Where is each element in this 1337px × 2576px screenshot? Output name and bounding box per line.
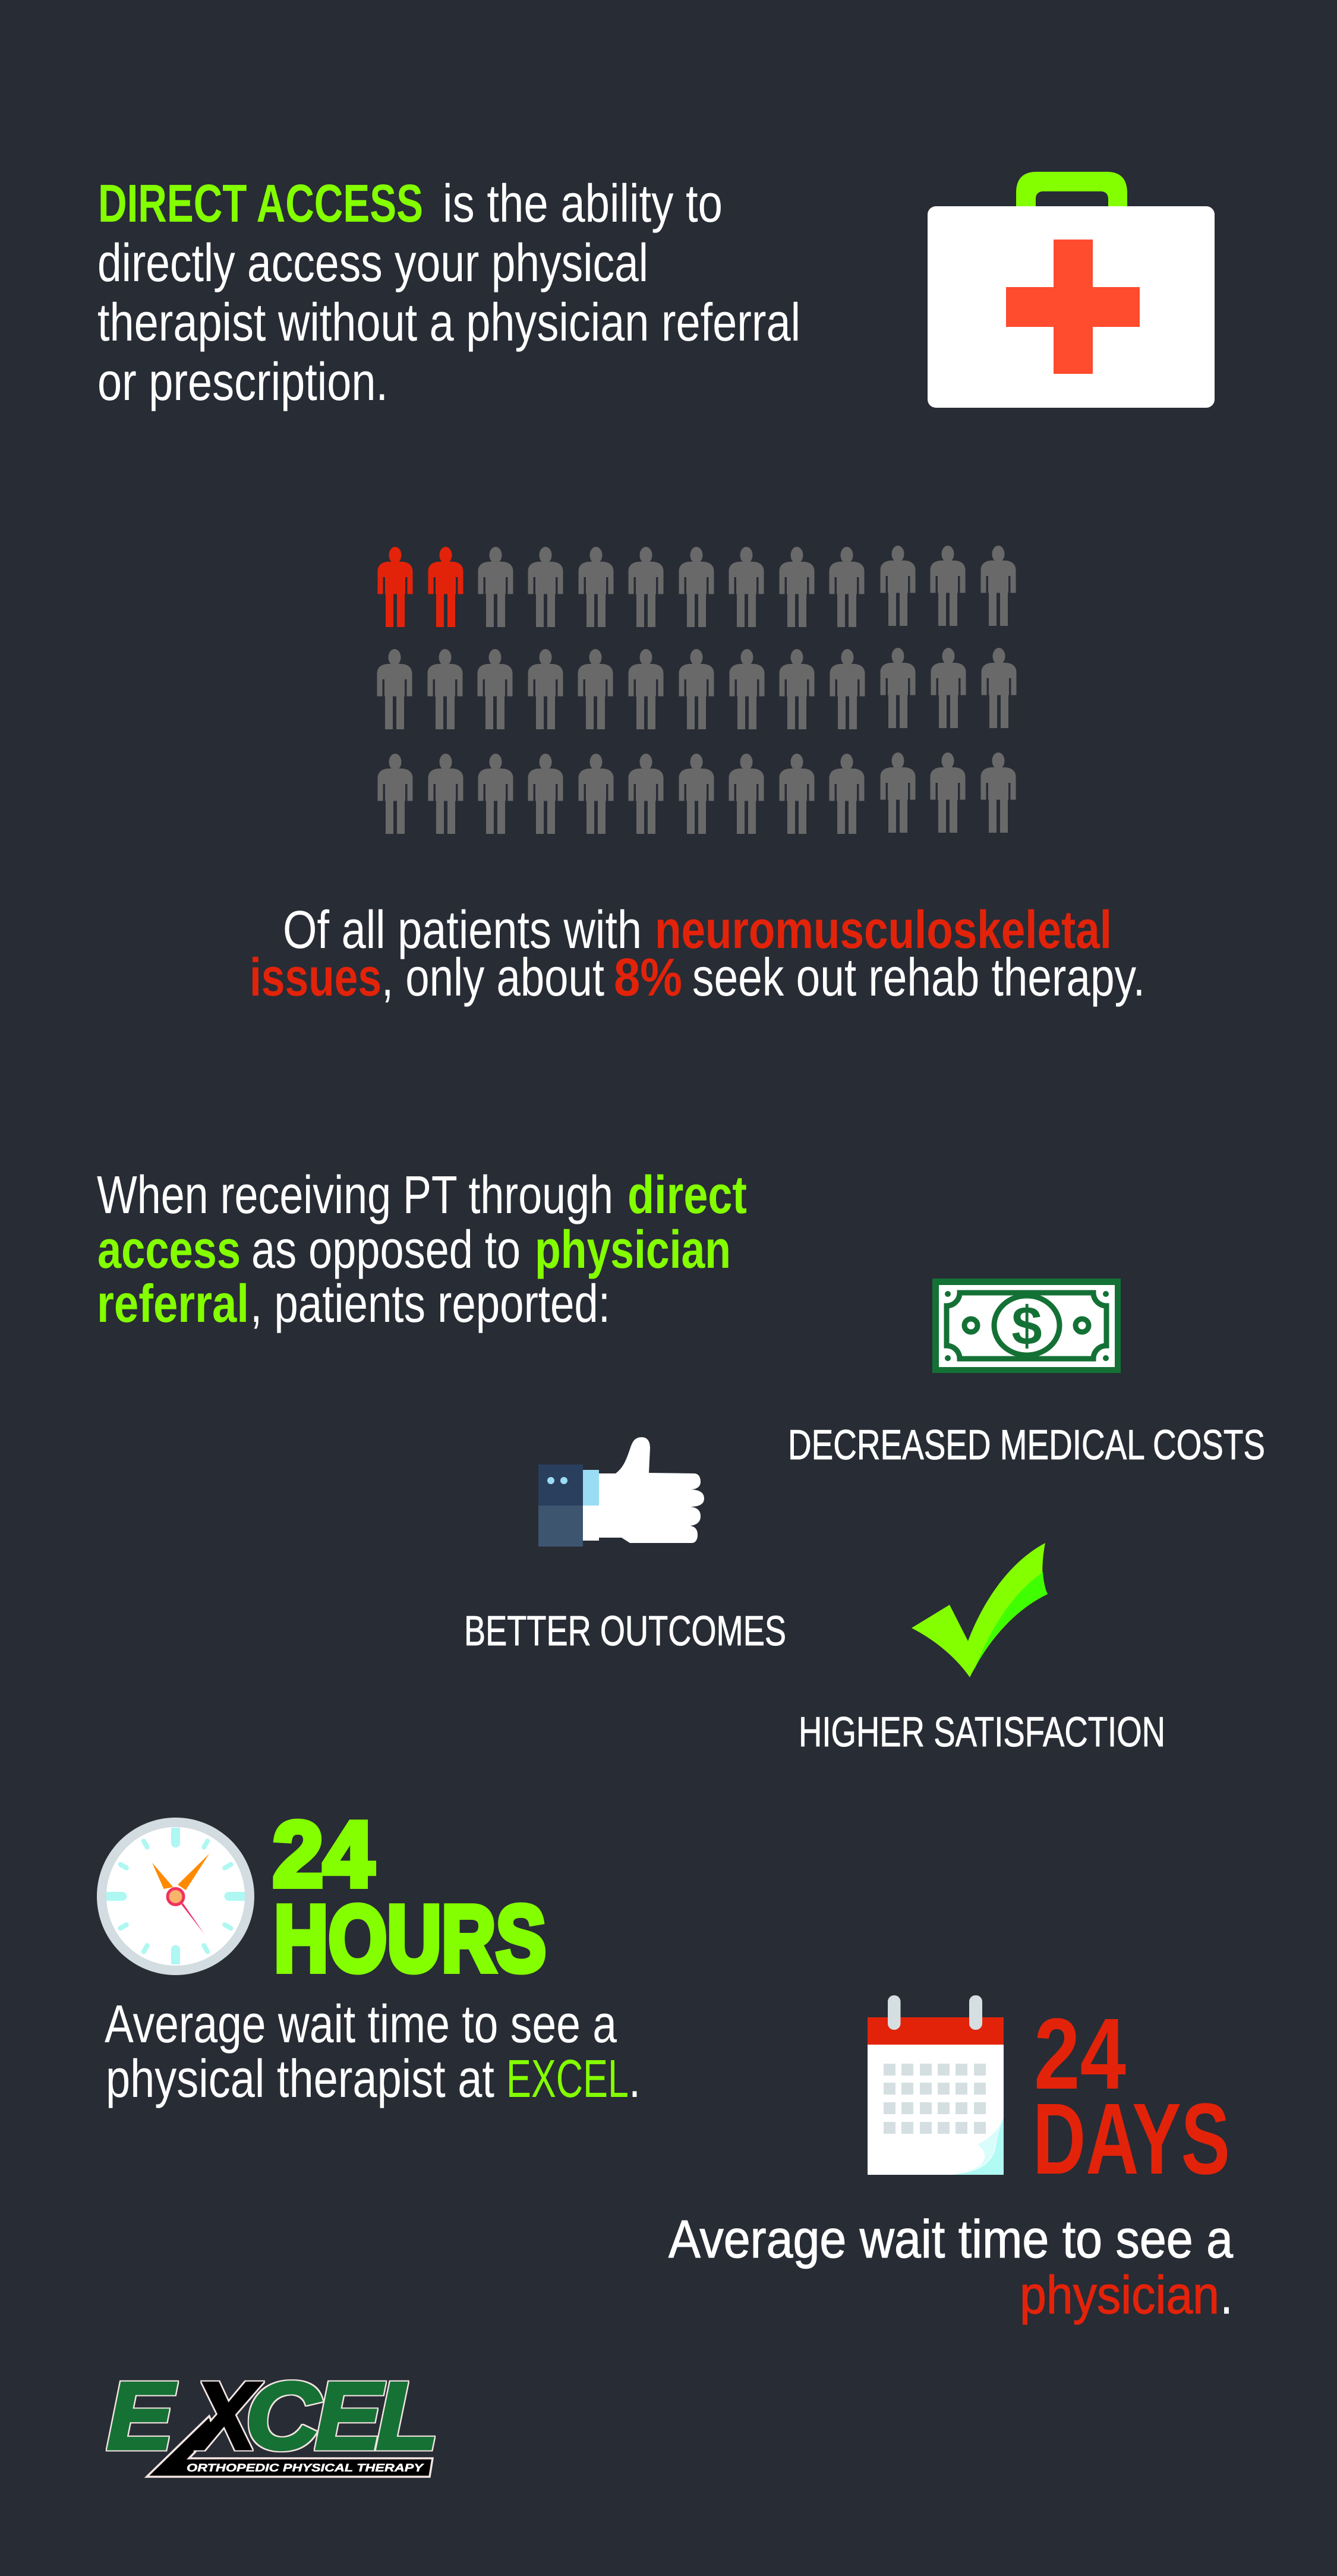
paragraph: direct access vs physician referral: direct <box>627 1166 747 1225</box>
paragraph: direct access vs physician referral: access <box>97 1220 241 1280</box>
paragraph: direct access vs physician referral: When receiving PT through <box>97 1166 613 1225</box>
icon: thumbs up <box>538 1437 704 1547</box>
text: average wait time to see a physician: Average wait time to see a <box>668 2210 1234 2269</box>
intro text: direct access definition: therapist without a physician referral <box>97 293 800 352</box>
text: average wait time to see a physician: physician <box>1020 2266 1219 2325</box>
statistic text: 8% seek rehab therapy: 8% <box>614 948 682 1007</box>
text: average wait time at Excel: physical therapist at <box>106 2049 494 2109</box>
intro text: direct access definition: or prescription. <box>97 352 388 412</box>
logo: Excel Orthopedic Physical Therapy: E <box>315 2363 384 2470</box>
statistic text: 8% seek rehab therapy: seek out rehab therapy. <box>692 948 1145 1007</box>
text: average wait time at Excel <box>105 1995 641 2109</box>
intro text: direct access definition: is the ability to <box>443 174 723 234</box>
icon: calendar <box>868 1995 1004 2175</box>
pictogram: row of patients, 2 highlighted <box>377 546 1016 834</box>
big stat: 24 days: DAYS <box>1033 2083 1230 2196</box>
intro text: direct access definition: DIRECT ACCESS <box>98 174 423 234</box>
text: average wait time to see a physician <box>668 2210 1234 2325</box>
paragraph: direct access vs physician referral: , patients reported: <box>250 1274 610 1334</box>
logo: Excel Orthopedic Physical Therapy <box>107 2363 439 2477</box>
intro text: direct access definition <box>97 174 800 412</box>
big stat: 24 hours <box>273 1803 546 1991</box>
statistic text: 8% seek rehab therapy: neuromusculoskeletal <box>655 900 1112 960</box>
intro text: direct access definition: directly access your physical <box>97 234 648 293</box>
paragraph: direct access vs physician referral: as opposed to <box>251 1220 521 1280</box>
statistic text: 8% seek rehab therapy: Of all patients with <box>283 900 642 960</box>
text: average wait time at Excel: . <box>629 2049 641 2109</box>
logo: Excel Orthopedic Physical Therapy: X <box>189 2363 261 2470</box>
logo: Excel Orthopedic Physical Therapy: E <box>107 2363 176 2470</box>
icon: first aid kit <box>928 172 1215 408</box>
big stat: 24 days: 24 <box>1034 1998 1126 2111</box>
icon: green check mark <box>912 1543 1048 1677</box>
icon: dollar bill: $ <box>1011 1296 1042 1356</box>
logo: Excel Orthopedic Physical Therapy: ORTHOPEDIC PHYSICAL THERAPY <box>187 2461 424 2474</box>
label: higher satisfaction: HIGHER SATISFACTION <box>799 1709 1165 1756</box>
text: average wait time at Excel: EXCEL <box>506 2049 629 2109</box>
paragraph: direct access vs physician referral: referral <box>97 1274 249 1334</box>
icon: dollar bill <box>932 1278 1121 1373</box>
paragraph: direct access vs physician referral: physician <box>535 1220 731 1280</box>
logo: Excel Orthopedic Physical Therapy: C <box>245 2363 321 2470</box>
statistic text: 8% seek rehab therapy: , only about <box>381 948 604 1007</box>
big stat: 24 hours: HOURS <box>274 1887 546 1991</box>
big stat: 24 hours: 24 <box>273 1803 374 1906</box>
label: better outcomes: BETTER OUTCOMES <box>464 1608 786 1655</box>
statistic text: 8% seek rehab therapy: issues <box>250 948 381 1007</box>
big stat: 24 days <box>1033 1998 1230 2196</box>
icon: clock <box>97 1818 254 1975</box>
logo: Excel Orthopedic Physical Therapy: L <box>376 2363 439 2470</box>
paragraph: direct access vs physician referral <box>97 1166 747 1334</box>
text: average wait time at Excel: Average wait time to see a <box>105 1995 617 2054</box>
text: average wait time to see a physician: . <box>1221 2266 1232 2325</box>
statistic text: 8% seek rehab therapy <box>250 900 1145 1007</box>
